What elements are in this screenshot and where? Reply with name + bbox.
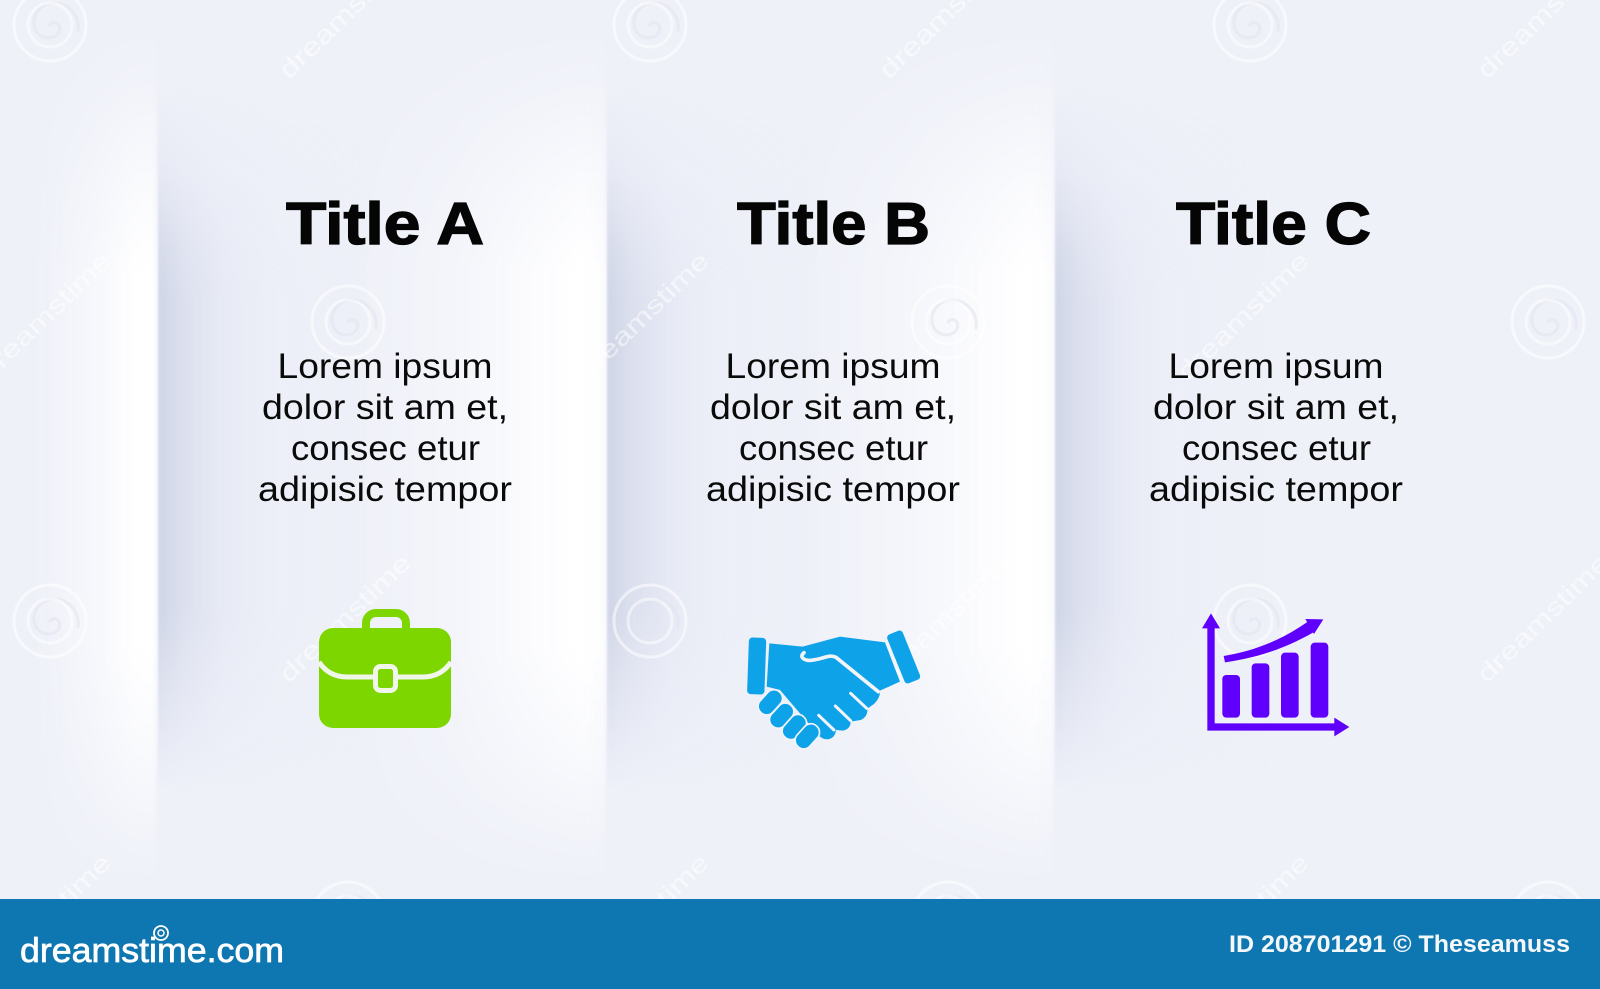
logo: dreamstime.com: dreamstime.com	[20, 932, 284, 970]
shadow: column B edge	[607, 166, 672, 748]
body text C: dolor sit am et,	[1153, 388, 1399, 427]
watermark text: dreamstime	[274, 549, 417, 688]
watermark text: dreamstime	[1172, 247, 1315, 386]
column A	[258, 191, 512, 728]
body text B: dolor sit am et,	[710, 388, 956, 427]
body text A: consec etur	[291, 429, 480, 468]
watermark text: dreamstime	[572, 849, 715, 988]
icon: handshake	[747, 629, 921, 751]
panel: left edge strip	[98, 156, 156, 773]
body text B	[706, 347, 960, 509]
footer band	[0, 899, 1600, 989]
icon: briefcase	[319, 613, 451, 728]
watermark text: dreamstime	[1172, 849, 1315, 988]
body text B: adipisic tempor	[706, 470, 960, 509]
title B: Title B	[737, 191, 930, 257]
body text A: adipisic tempor	[258, 470, 512, 509]
body text A	[258, 347, 512, 509]
column B	[706, 191, 960, 751]
image ID and credit: ID 208701291 © Theseamuss	[1229, 931, 1570, 958]
icon: rising bar chart	[1202, 613, 1349, 736]
body text C: Lorem ipsum	[1168, 347, 1384, 386]
panel: column A background	[493, 156, 605, 773]
shadow: column A edge	[158, 166, 222, 748]
watermark text: dreamstime	[1472, 549, 1600, 688]
panel: column B background	[941, 156, 1053, 773]
body text C: adipisic tempor	[1149, 470, 1403, 509]
shadow: column C edge	[1055, 166, 1120, 748]
body text A: dolor sit am et,	[262, 388, 508, 427]
title A: Title A	[286, 191, 484, 257]
body text A: Lorem ipsum	[278, 347, 492, 386]
body text C	[1149, 347, 1403, 509]
body text C: consec etur	[1182, 429, 1371, 468]
body text B: Lorem ipsum	[726, 347, 940, 386]
column C	[1149, 191, 1403, 736]
watermark text: dreamstime	[874, 549, 1017, 688]
watermark text: dreamstime	[572, 247, 715, 386]
body text B: consec etur	[739, 429, 928, 468]
title C: Title C	[1176, 191, 1371, 257]
